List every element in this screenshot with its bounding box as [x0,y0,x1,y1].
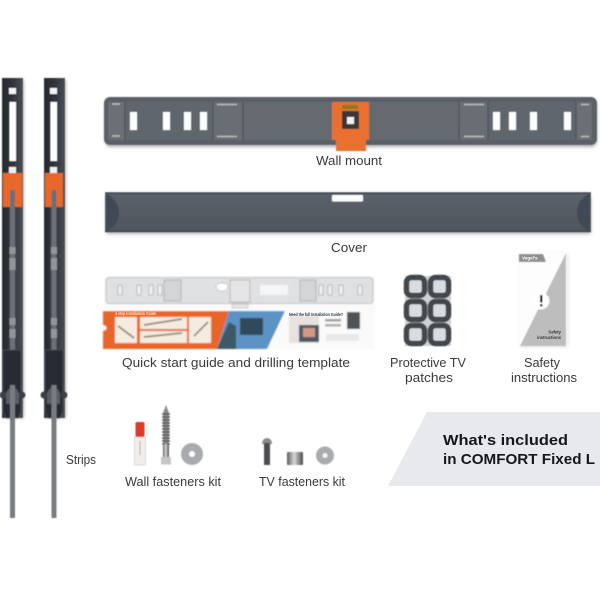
template headings: Need the full Installation Guide? [289,312,343,318]
label: TV fasteners kit: TV fasteners kit [259,475,346,489]
template headings [115,311,343,318]
label: protective TV patches [390,355,466,385]
label: protective TV patches: patches [405,370,454,385]
label: cover: Cover [331,240,368,255]
booklet text: Vogel's [522,256,538,260]
label: wall mount: Wall mount [316,153,382,168]
label: quick start guide: Quick start guide and drilling template [122,355,350,370]
TV fasteners kit icons [262,438,334,465]
quick start guide and drilling template [102,277,375,349]
label: safety instructions: instructions [511,370,578,385]
label: safety instructions [511,355,578,385]
template headings: 4 step Installation Guide [115,311,156,316]
label: protective TV patches: Protective TV [390,355,466,370]
booklet text: instructions [537,335,562,340]
protective TV patches [405,276,451,346]
booklet text [522,256,562,340]
wall mount [104,97,597,151]
strip right [40,78,68,518]
callout banner [388,412,600,486]
safety instructions booklet [519,252,568,347]
label: safety instructions: Safety [524,355,560,370]
label: strips: Strips [66,453,96,467]
callout heading [443,432,595,468]
booklet text: Safety [548,330,562,334]
callout heading: in COMFORT Fixed L [443,451,595,468]
cover [105,193,591,234]
wall fasteners kit icons [134,405,203,465]
label: wall fasteners kit: Wall fasteners kit [125,475,222,489]
strip left [0,78,26,518]
callout heading: What's included [443,432,568,449]
